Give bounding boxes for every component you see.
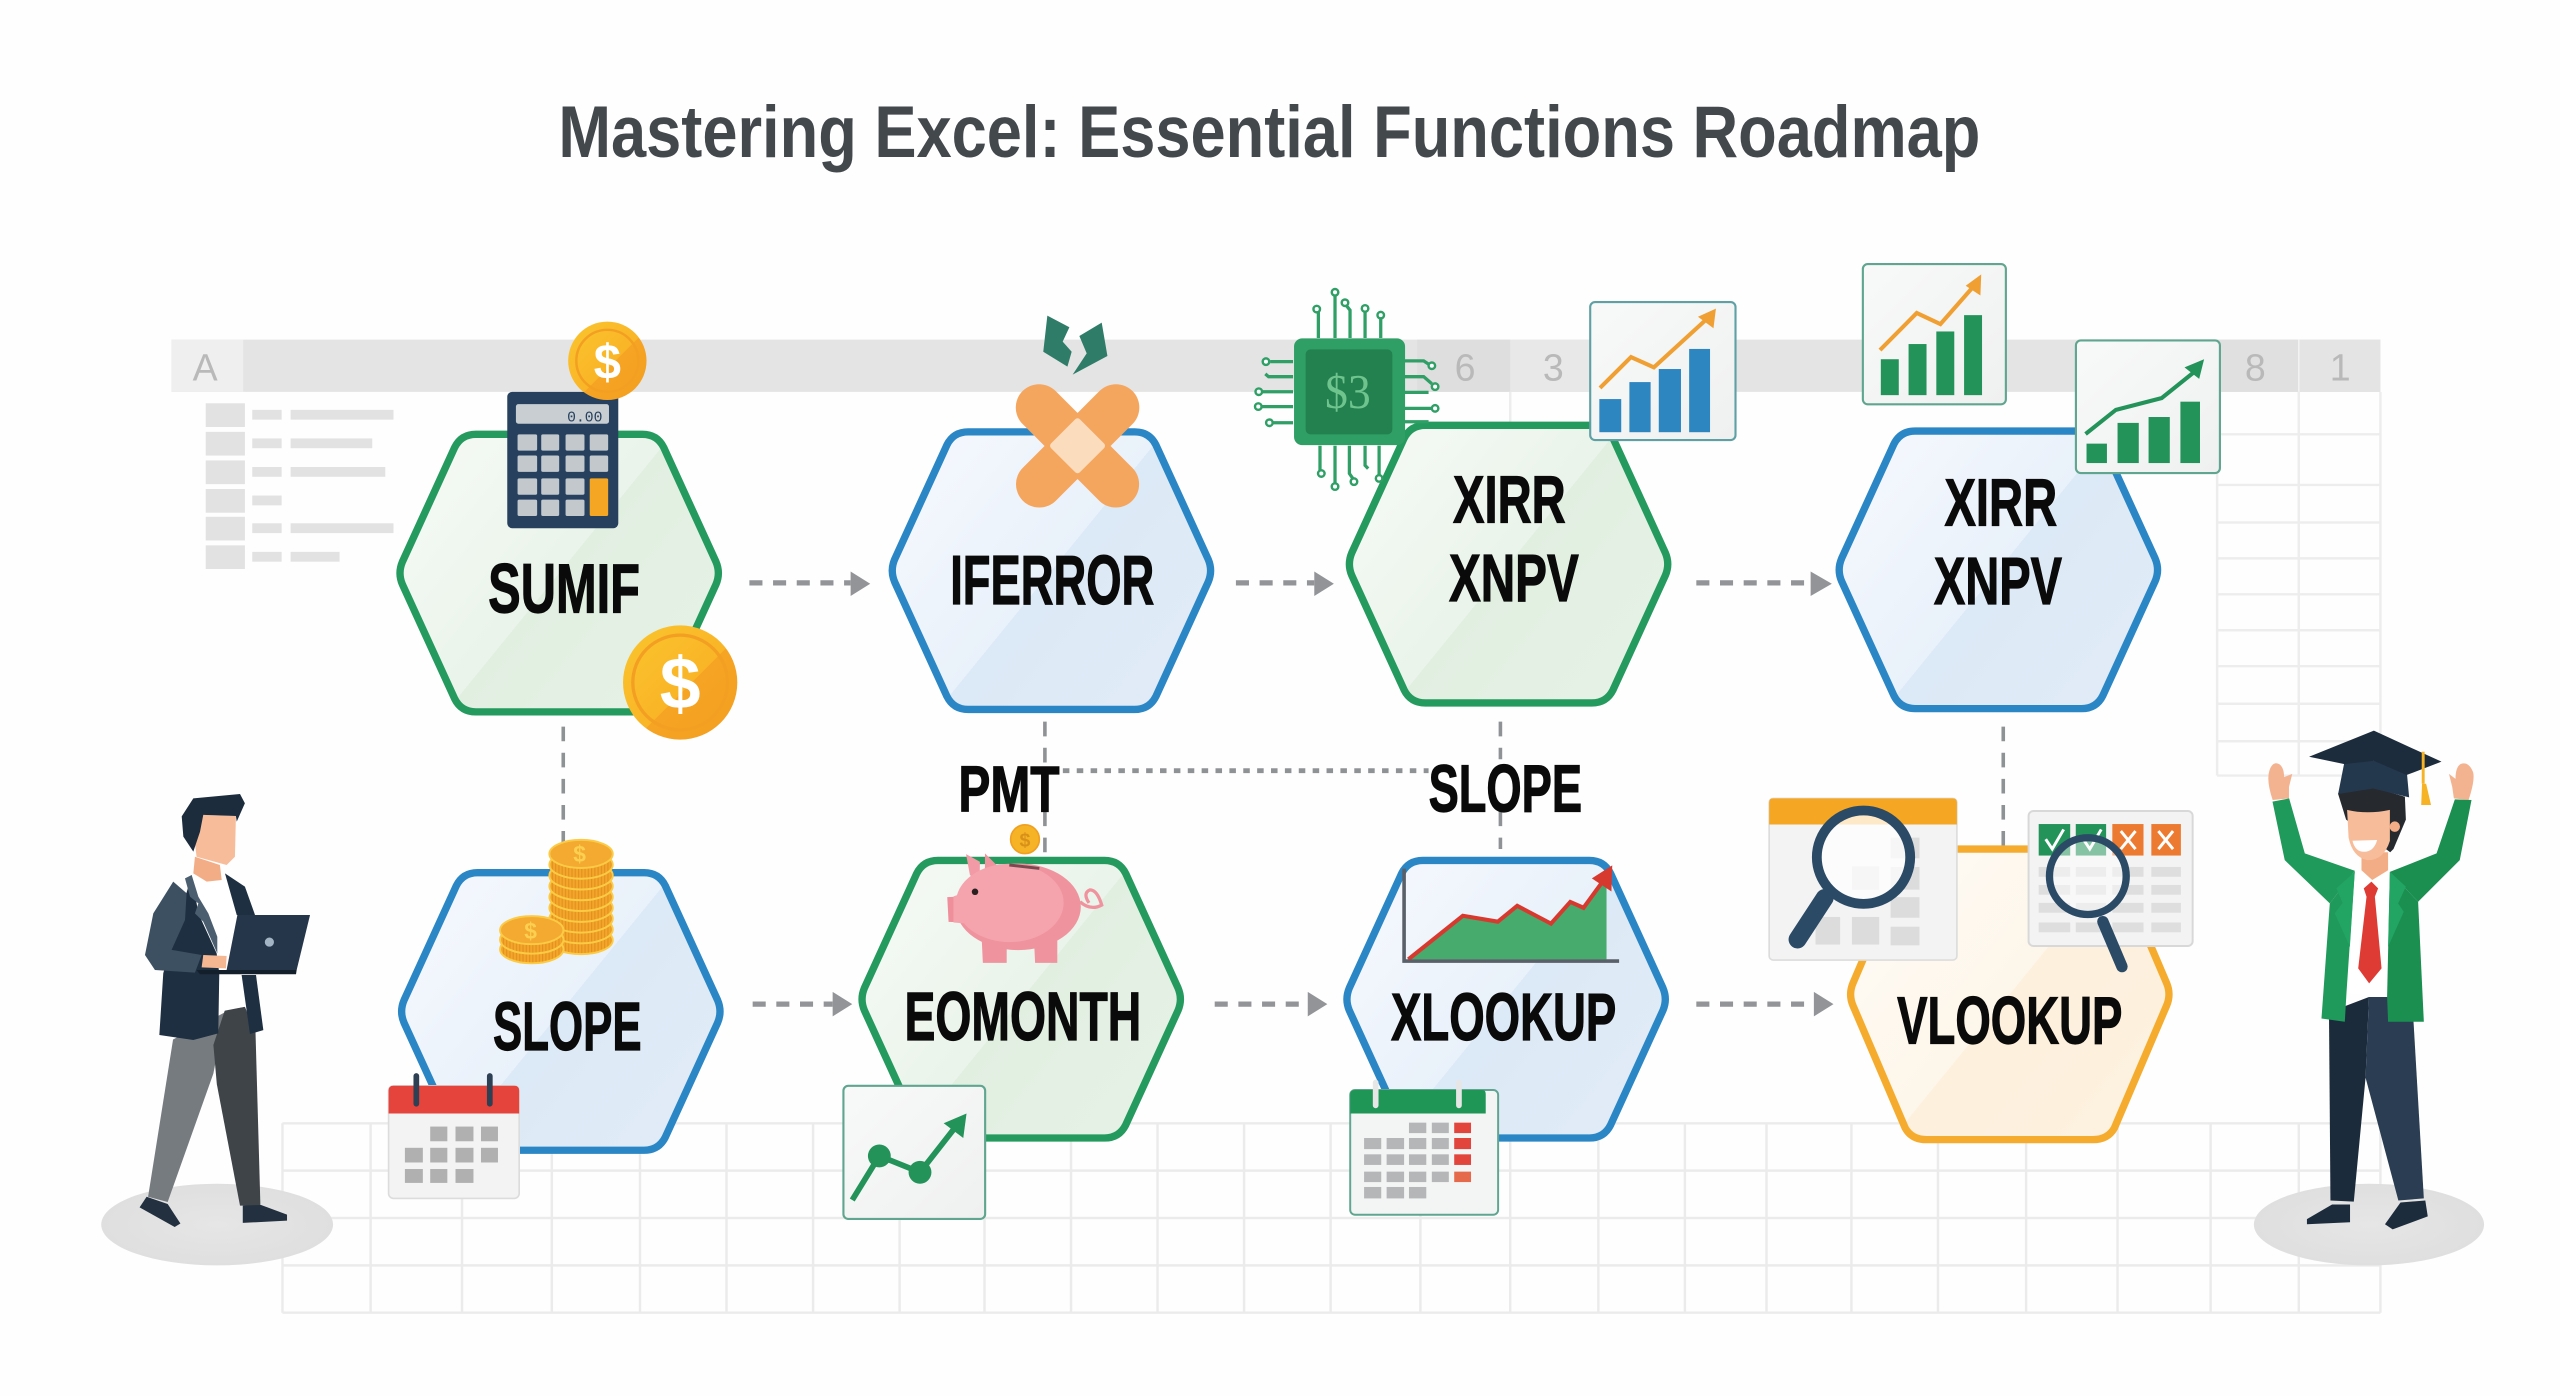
spreadsheet header bar: 3	[1543, 346, 1564, 388]
arrow: EOMONTH to XLOOKUP	[1215, 992, 1327, 1016]
node: XLOOKUP hexagon	[1347, 860, 1665, 1138]
label: XIRR green: XIRR	[1453, 462, 1566, 537]
arrow: XIRR to XIRR	[1696, 571, 1832, 596]
icon: piggy bank with coin	[947, 825, 1102, 963]
icon: search card orange	[1769, 798, 1957, 960]
node: SUMIF hexagon	[400, 434, 718, 712]
node: EOMONTH hexagon	[862, 860, 1180, 1138]
icon: dollar coin bottom: $	[660, 642, 701, 725]
title: Mastering Excel: Essential Functions Roadmap	[558, 90, 1980, 173]
icon: dollar coin top: $	[594, 336, 621, 390]
icon: line chart card	[843, 1086, 985, 1219]
icon: coin stacks: $	[573, 841, 586, 867]
spreadsheet grid right column	[1510, 392, 2380, 776]
dotted link PMT to SLOPE	[1063, 769, 1429, 772]
spreadsheet header bar: 8	[2245, 346, 2266, 388]
icon: piggy bank with coin: $	[1020, 830, 1031, 852]
sidebar list placeholder	[206, 403, 393, 569]
icon: red calendar	[389, 1076, 519, 1198]
icon: coin stacks: $	[524, 918, 537, 944]
icon: green bar chart card with orange trend	[1863, 264, 2006, 404]
label: VLOOKUP: VLOOKUP	[1897, 983, 2122, 1058]
icon: green calendar	[1350, 1082, 1498, 1215]
icon: area chart	[1404, 865, 1619, 961]
label: PMT: PMT	[958, 752, 1060, 825]
spreadsheet grid bottom	[282, 1123, 2380, 1313]
person: professional with laptop	[101, 794, 333, 1265]
node: XIRR XNPV green hexagon	[1349, 425, 1668, 703]
connector lines	[563, 722, 2003, 870]
label: XNPV blue: XNPV	[1934, 544, 2062, 619]
arrow: SUMIF to IFERROR	[749, 571, 870, 596]
icon: calculator: 0.00	[567, 410, 602, 426]
label: SLOPE: SLOPE	[493, 988, 642, 1065]
label: EOMONTH: EOMONTH	[904, 978, 1141, 1055]
node: SLOPE hexagon	[402, 873, 720, 1150]
icon: dollar coin top	[568, 322, 647, 400]
spreadsheet header bar: 6	[1455, 346, 1476, 388]
label: SUMIF: SUMIF	[488, 549, 640, 627]
arrow: SLOPE to EOMONTH	[753, 992, 852, 1016]
node: XIRR XNPV blue hexagon	[1839, 431, 2158, 709]
icon: search table card	[2029, 811, 2193, 967]
spreadsheet header bar: 1	[2330, 346, 2351, 388]
person: graduate celebrating	[2254, 731, 2484, 1265]
icon: circuit chip: $3	[1325, 364, 1371, 419]
icon: dollar coin bottom	[623, 625, 737, 740]
spreadsheet header bar	[171, 340, 2380, 392]
node: VLOOKUP hexagon	[1851, 849, 2169, 1140]
icon: bandage	[1006, 375, 1149, 517]
icon: crack marks	[1043, 316, 1107, 375]
arrow: XLOOKUP to VLOOKUP	[1696, 992, 1833, 1016]
label: XLOOKUP: XLOOKUP	[1391, 980, 1616, 1055]
icon: circuit chip	[1255, 289, 1438, 490]
label: SLOPE middle: SLOPE	[1429, 751, 1582, 826]
spreadsheet header bar: A	[193, 346, 218, 388]
icon: green bar chart card with green trend	[2076, 340, 2220, 473]
label: XNPV green: XNPV	[1449, 541, 1579, 616]
label: IFERROR: IFERROR	[950, 541, 1154, 619]
node: IFERROR hexagon	[892, 432, 1211, 709]
arrow: IFERROR to XIRR	[1236, 571, 1334, 596]
icon: calculator	[507, 392, 618, 528]
label: XIRR blue: XIRR	[1944, 466, 2057, 541]
icon: blue bar chart card	[1590, 302, 1736, 440]
icon: coin stacks	[500, 840, 613, 963]
